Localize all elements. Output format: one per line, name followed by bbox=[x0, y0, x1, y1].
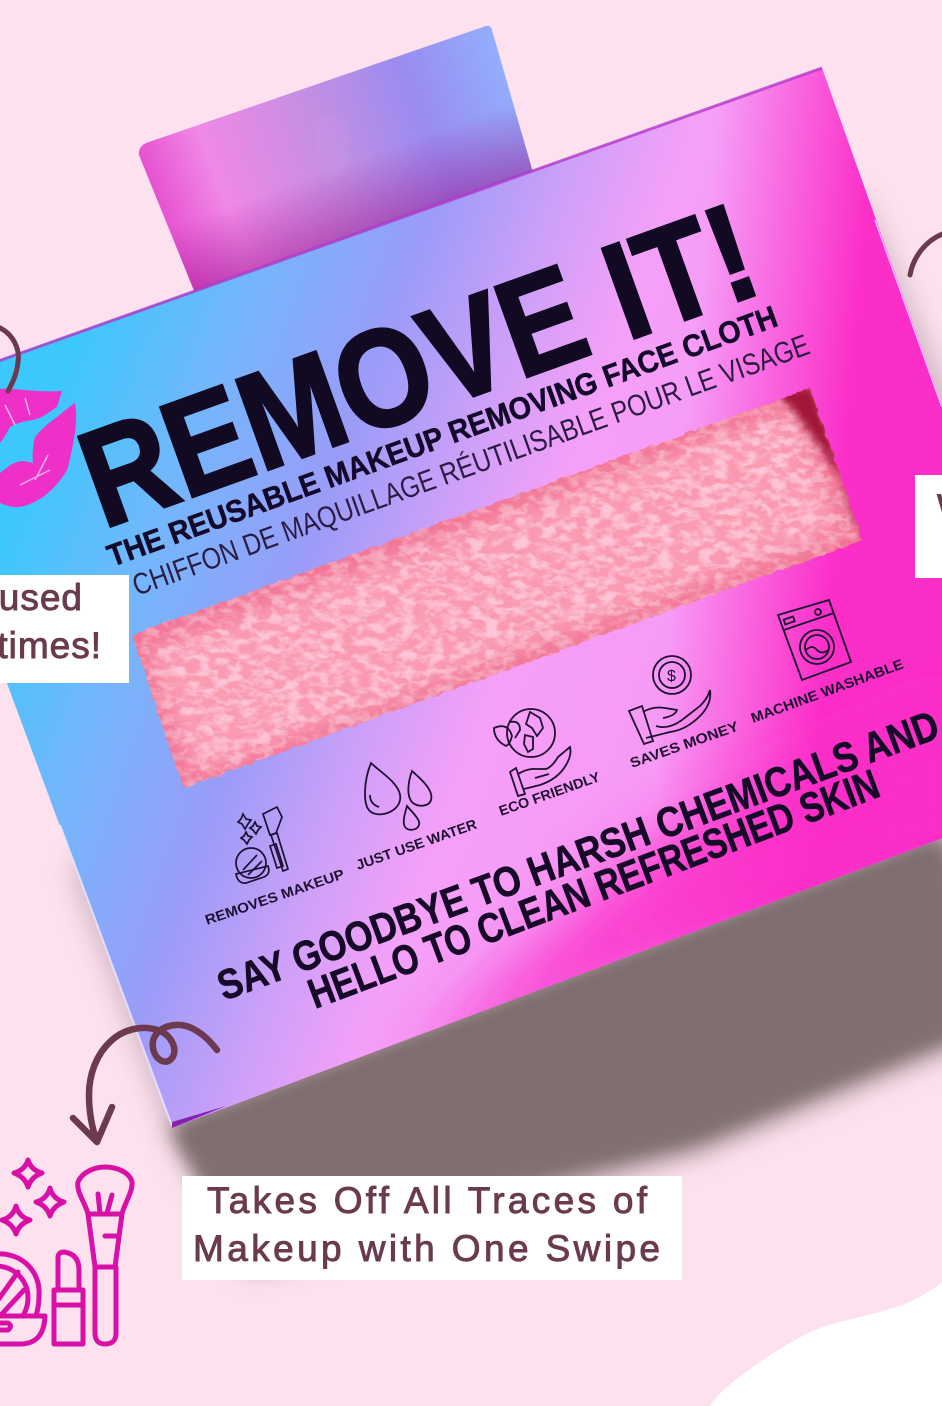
feature: machine washable bbox=[749, 600, 905, 726]
back flap of box bbox=[139, 26, 534, 293]
subheading: English: THE REUSABLE MAKEUP REMOVING FACE CLOTH bbox=[102, 299, 782, 574]
icon: washing machine bbox=[778, 600, 851, 680]
label: SAVES MONEY bbox=[628, 718, 741, 771]
label: JUST USE WATER bbox=[354, 816, 479, 873]
white corner blob bbox=[710, 1282, 942, 1406]
icon: makeup set bbox=[0, 1160, 132, 1344]
label: ECO FRIENDLY bbox=[497, 768, 603, 819]
compact bbox=[0, 1254, 45, 1344]
box front bbox=[0, 68, 942, 1128]
subheading: French: CHIFFON DE MAQUILLAGE RÉUTILISABLE POUR LE VISAGE bbox=[128, 329, 814, 603]
sparkle 1 bbox=[14, 1160, 42, 1187]
sparkle 2 bbox=[36, 1188, 64, 1216]
arrow: top right bbox=[910, 233, 942, 275]
icon: water drops bbox=[365, 763, 431, 830]
feature: removes makeup bbox=[203, 807, 346, 928]
face cloth in window bbox=[132, 386, 868, 788]
feature: saves money bbox=[628, 656, 741, 771]
slogan bbox=[211, 701, 942, 1017]
callout line 1: used bbox=[0, 577, 83, 618]
label: MACHINE WASHABLE bbox=[749, 656, 905, 726]
callout: takes off all traces bbox=[182, 1176, 682, 1280]
feature: just use water bbox=[354, 763, 479, 873]
icon: globe in hand bbox=[494, 709, 570, 796]
makeup brush bbox=[78, 1167, 132, 1344]
callout line 2: times! bbox=[0, 625, 102, 666]
box shadow on background bbox=[72, 195, 942, 1268]
arrow: top left bbox=[0, 327, 18, 391]
icon: coin over hand: $ bbox=[667, 668, 676, 685]
heading: REMOVE IT!: REMOVE IT! bbox=[61, 174, 776, 557]
icon: makeup set bbox=[236, 807, 288, 883]
callout line 1: Takes Off All Traces of bbox=[207, 1180, 648, 1221]
callout line 2: Makeup with One Swipe bbox=[193, 1228, 660, 1269]
icon: lips logo bbox=[0, 389, 76, 507]
callout: right label cut off at edge bbox=[915, 475, 942, 578]
label: REMOVES MAKEUP bbox=[203, 866, 346, 928]
sparkle 3 bbox=[2, 1206, 30, 1234]
arrow: curly down to makeup icon bbox=[73, 1025, 217, 1142]
lipstick bbox=[54, 1252, 83, 1344]
feature: eco friendly bbox=[494, 709, 603, 819]
callout: used times bbox=[0, 575, 129, 683]
